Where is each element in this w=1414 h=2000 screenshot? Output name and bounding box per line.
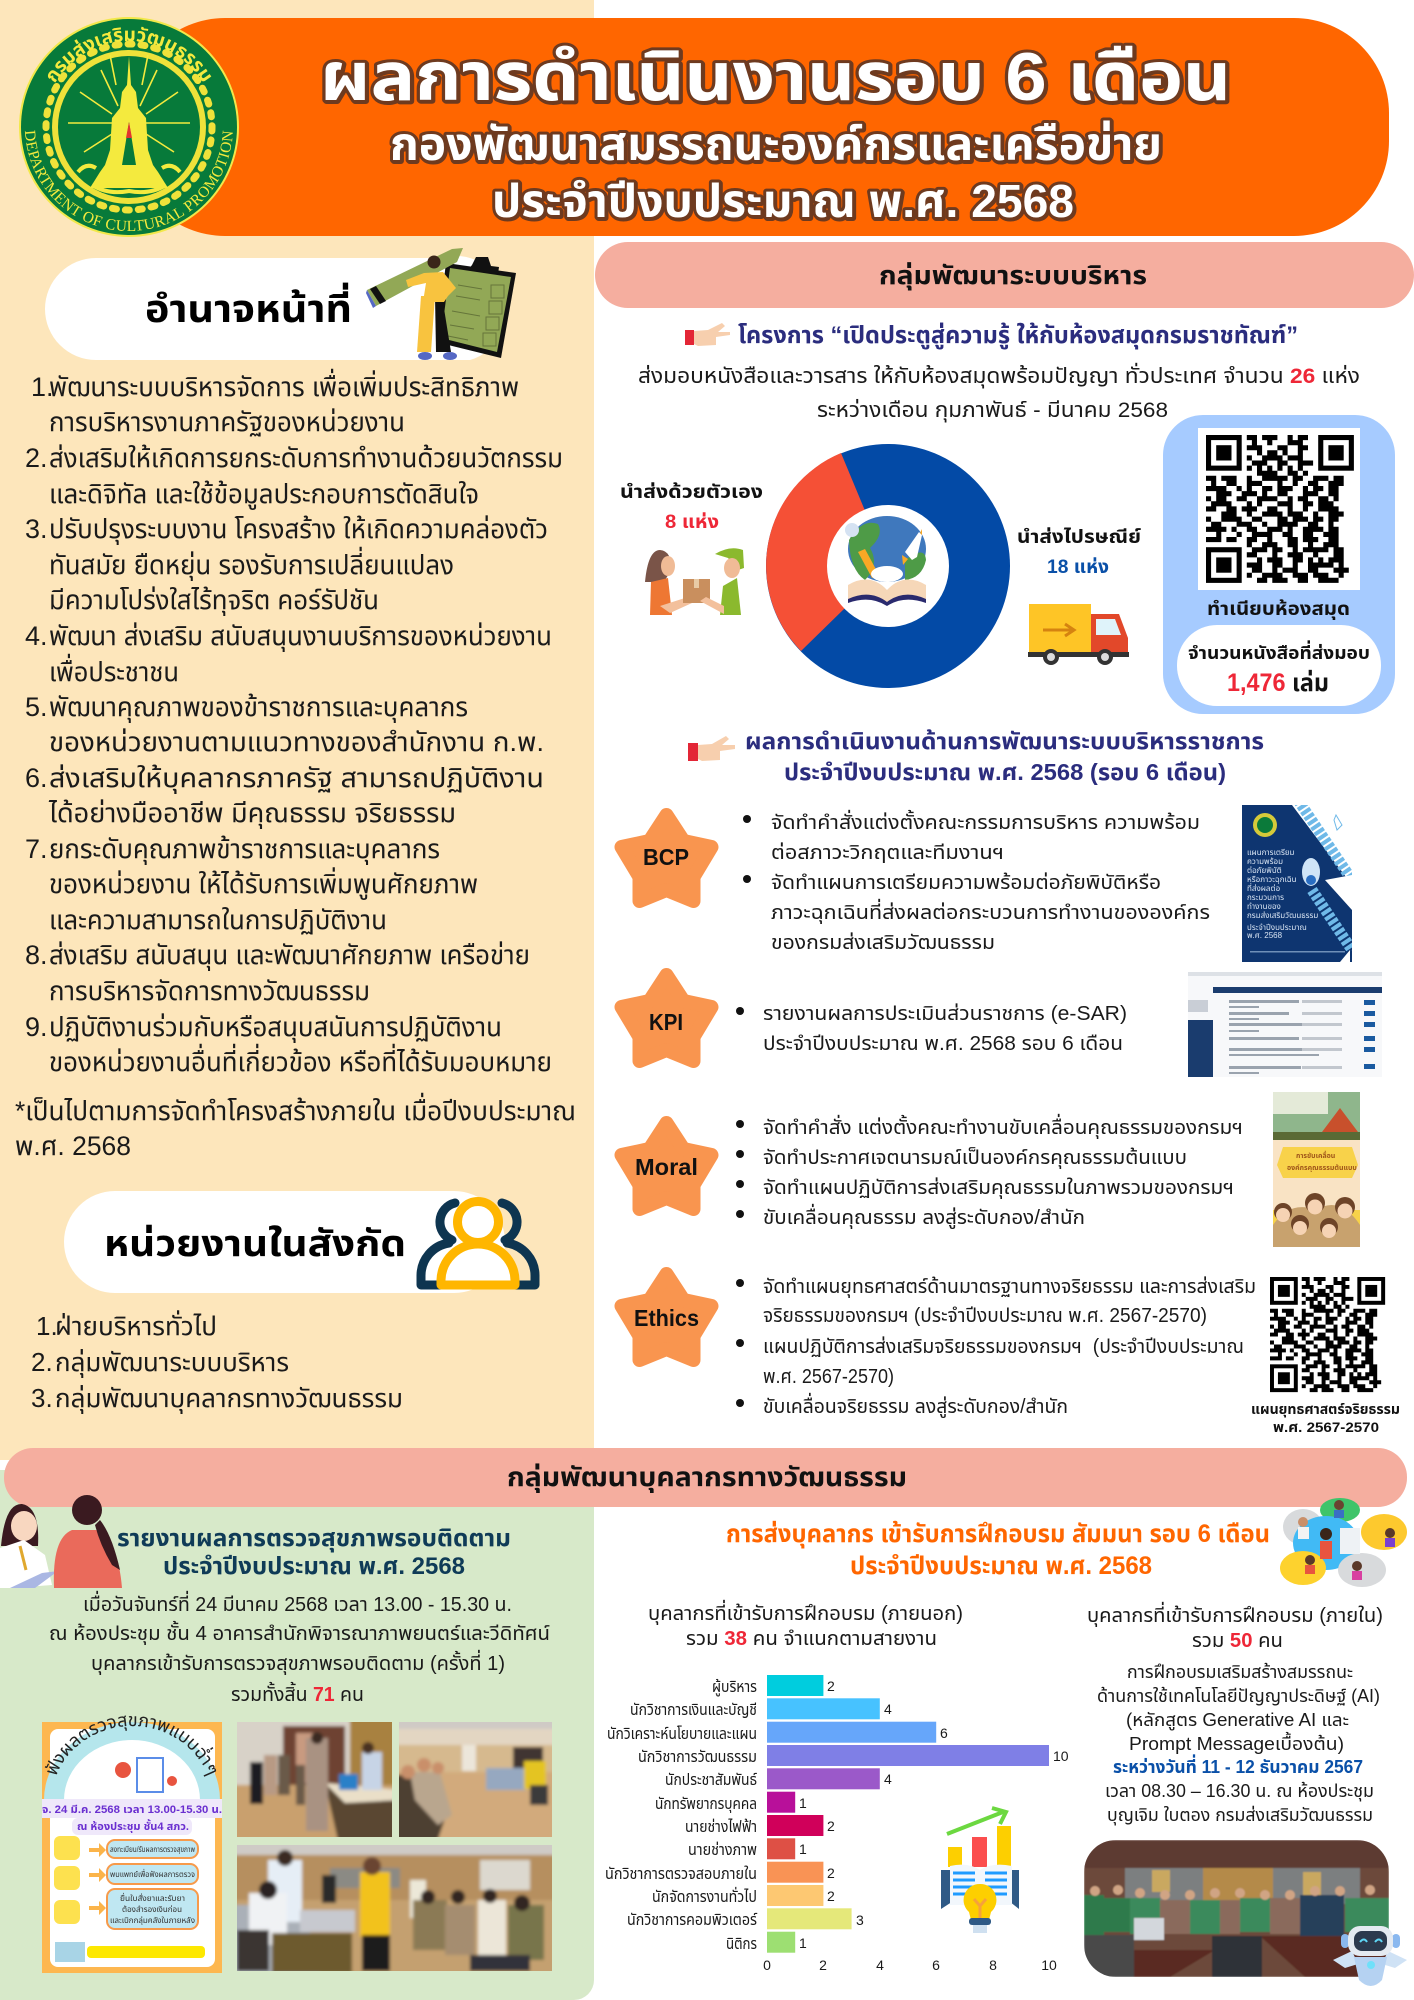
green panel background: [0, 1470, 594, 2000]
bar chart: external training by job line: 0: [763, 1957, 771, 1973]
text block: sub-units list: 2.: [31, 1347, 53, 1377]
panel: library directory QR and total books: ทำเนียบห้องสมุด: [1207, 598, 1350, 620]
text block: library project description: [638, 362, 1360, 423]
bar chart: external training by job line: 3: [856, 1912, 864, 1928]
icon: Ethics star: Ethics: [634, 1305, 699, 1331]
text block: duties list: ของหน่วยงาน ให้ได้รับการเพิ่มพูนศักยภาพ: [49, 867, 478, 900]
bar chart: external training by job line: นิติกร: [726, 1936, 757, 1953]
bar chart: external training by job line: 2: [827, 1678, 835, 1694]
text block: duties list: ได้อย่างมืออาชีพ มีคุณธรรม จริยธรรม: [48, 798, 456, 829]
text block: sub-units list: 1.: [36, 1311, 58, 1341]
text block: duties list: พัฒนาคุณภาพของข้าราชการและบุคลากร: [49, 692, 468, 723]
chart label: delivered by post: นำส่งไปรษณีย์: [1017, 526, 1141, 548]
bar chart: external training by job line: นายช่างไฟฟ้า: [685, 1818, 757, 1836]
text block: internal training details: รวม 50 คน: [1192, 1630, 1283, 1652]
image: BCP plan cover: แผนการเตรียม: [1247, 847, 1295, 857]
callout: number of books delivered: จำนวนหนังสือที่ส่งมอบ: [1188, 640, 1370, 663]
text block: KPI items: ประจำปีงบประมาณ พ.ศ. 2568 รอบ 6 เดือน: [763, 1033, 1123, 1055]
bar chart: external training by job line: 1: [799, 1841, 807, 1857]
text block: duties list: การบริหารจัดการทางวัฒนธรรม: [49, 976, 370, 1006]
heading: personnel development group: กลุ่มพัฒนาบุคลากรทางวัฒนธรรม: [507, 1462, 907, 1493]
text block: BCP items: จัดทำแผนการเตรียมความพร้อมต่อภัยพิบัติหรือ: [771, 871, 1161, 894]
image: BCP plan cover: ประจำปีงบประมาณ: [1247, 923, 1307, 932]
text block: external training heading: [648, 1599, 963, 1650]
image: BCP plan cover: ที่ส่งผลต่อ: [1247, 882, 1281, 893]
image: health check poster: จ. 24 มี.ค. 2568 เวลา 13.00-15.30 น.: [42, 1804, 222, 1816]
heading: management system group: [595, 242, 1414, 308]
text block: BCP items: [743, 809, 1210, 954]
icon: online learning group: [1280, 1498, 1407, 1587]
text block: internal training details: ด้านการใช้เทคโนโลยีปัญญาประดิษฐ์ (AI): [1097, 1686, 1380, 1706]
text block: Moral items: จัดทำแผนปฏิบัติการส่งเสริมคุณธรรมในภาพรวมของกรมฯ: [763, 1176, 1234, 1199]
panel: Moral: [622, 1092, 1360, 1247]
bar chart: external training by job line: 2: [827, 1888, 835, 1904]
donut chart: [766, 444, 1010, 688]
chart label: delivered in person: นำส่งด้วยตัวเอง: [620, 481, 763, 503]
heading: health check report: ประจำปีงบประมาณ พ.ศ. 2568: [163, 1553, 465, 1580]
text block: BCP items: ภาวะฉุกเฉินที่ส่งผลต่อกระบวนการทำงานขององค์กร: [771, 898, 1210, 924]
bar chart: external training by job line: 4: [884, 1771, 892, 1787]
text block: health check details: ณ ห้องประชุม ชั้น 4 อาคารสำนักพิจารณาภาพยนตร์และวีดิทัศน์: [49, 1620, 550, 1645]
text block: footnote: พ.ศ. 2568: [15, 1131, 131, 1161]
image: BCP plan cover: [1242, 800, 1352, 962]
text block: duties list: ทันสมัย ยืดหยุ่น รองรับการเปลี่ยนแปลง: [49, 546, 454, 581]
icon: pointing hand: [688, 736, 735, 761]
panel: Ethics: [622, 1274, 1400, 1435]
text block: internal training details: บุคลากรที่เข้ารับการฝึกอบรม (ภายใน): [1087, 1601, 1383, 1627]
bar chart: external training by job line: นักประชาสัมพันธ์: [665, 1772, 757, 1789]
bar chart: external training by job line: 8: [989, 1957, 997, 1973]
bar chart: external training by job line: [605, 1675, 1069, 1973]
text block: duties list: พัฒนา ส่งเสริม สนับสนุนงานบริการของหน่วยงาน: [49, 621, 552, 652]
text block: sub-units list: 3.: [31, 1383, 53, 1413]
bar chart: external training by job line: 1: [799, 1795, 807, 1811]
image: health check poster: ลงทะเบียน/รับผลการตรวจสุขภาพ: [110, 1844, 195, 1854]
image: BCP plan cover: หรือภาวะฉุกเฉิน: [1247, 874, 1297, 884]
text block: sub-units list: กลุ่มพัฒนาบุคลากรทางวัฒนธรรม: [55, 1383, 403, 1414]
bar chart: external training by job line: นักจัดการงานทั่วไป: [652, 1886, 757, 1906]
icon: delivery truck: [1028, 604, 1129, 665]
text block: duties list: ส่งเสริมให้บุคลากรภาครัฐ สามารถปฏิบัติงาน: [49, 763, 544, 794]
heading: administration results: ผลการดำเนินงานด้านการพัฒนาระบบบริหารราชการ: [745, 728, 1264, 754]
heading: training results: การส่งบุคลากร เข้ารับการฝึกอบรม สัมมนา รอบ 6 เดือน: [726, 1520, 1270, 1549]
bar chart: external training by job line: 4: [876, 1957, 884, 1973]
image: health check poster: ยื่นใบสั่งยาและรับยา: [120, 1892, 185, 1903]
heading: training results: ประจำปีงบประมาณ พ.ศ. 2568: [850, 1552, 1152, 1580]
text block: health check details: เมื่อวันจันทร์ที่ 24 มีนาคม 2568 เวลา 13.00 - 15.30 น.: [83, 1590, 512, 1616]
text block: internal training details: [1087, 1601, 1383, 1826]
text block: duties list: 8.: [25, 940, 48, 970]
text block: health check details: บุคลากรเข้ารับการตรวจสุขภาพรอบติดตาม (ครั้งที่ 1): [91, 1649, 505, 1675]
text block: internal training details: (หลักสูตร Generative AI และ: [1126, 1710, 1349, 1732]
text block: library project description: ส่งมอบหนังสือและวารสาร ให้กับห้องสมุดพร้อมปัญญา ทั่วประเทศ จำนวน 26 แห่ง: [638, 362, 1360, 389]
bar chart: external training by job line: 2: [827, 1865, 835, 1881]
bar chart: external training by job line: 10: [1041, 1957, 1057, 1973]
bar chart: external training by job line: 2: [827, 1818, 835, 1834]
text block: sub-units list: [31, 1309, 403, 1414]
QR code: ethics strategy: [1270, 1279, 1383, 1390]
icon: pointing hand: [685, 323, 730, 346]
photo: seated staff: [399, 1722, 552, 1837]
text block: external training heading: บุคลากรที่เข้ารับการฝึกอบรม (ภายนอก): [648, 1599, 963, 1625]
text block: health check details: รวมทั้งสิ้น 71 คน: [231, 1681, 364, 1706]
text block: library project description: ระหว่างเดือน กุมภาพันธ์ - มีนาคม 2568: [817, 398, 1168, 423]
icon: people exchanging parcel: [645, 548, 744, 615]
bar chart: external training by job line: นักวิชาการเงินและบัญชี: [630, 1702, 757, 1719]
text block: duties list: มีความโปร่งใสไร้ทุจริต คอร์รัปชัน: [49, 585, 379, 616]
text block: sub-units list: กลุ่มพัฒนาระบบบริหาร: [55, 1347, 289, 1378]
caption: ethics strategy QR: [1251, 1401, 1400, 1435]
icon: robot mascot: [1333, 1926, 1407, 1986]
bar chart: external training by job line: นักทรัพยากรบุคคล: [655, 1796, 757, 1813]
bar chart: external training by job line: นักวิชาการวัฒนธรรม: [638, 1749, 757, 1766]
image: e-SAR screenshot: [1188, 972, 1382, 1077]
panel: BCP: [622, 800, 1352, 962]
left cream background column: [0, 0, 594, 1460]
text block: Ethics items: ขับเคลื่อนจริยธรรม ลงสู่ระดับกอง/สำนัก: [763, 1392, 1068, 1419]
text block: internal training details: เวลา 08.30 – 16.30 น. ณ ห้องประชุม: [1105, 1781, 1374, 1802]
bar chart: external training by job line: 2: [819, 1957, 827, 1973]
text block: Moral items: จัดทำประกาศเจตนารมณ์เป็นองค์กรคุณธรรมต้นแบบ: [763, 1146, 1187, 1169]
icon: people group: [421, 1202, 535, 1285]
QR code: library directory: [1198, 428, 1360, 590]
photo: training group: [1084, 1840, 1389, 1977]
icon: doctor and patient: [0, 1495, 122, 1588]
caption: ethics strategy QR: พ.ศ. 2567-2570: [1273, 1419, 1379, 1435]
text block: internal training details: การฝึกอบรมเสริมสร้างสมรรถนะ: [1127, 1662, 1353, 1682]
panel: sub-units heading: [64, 1191, 505, 1293]
heading: personnel development group: [4, 1448, 1407, 1507]
bar chart: external training by job line: 1: [799, 1935, 807, 1951]
text block: Ethics items: จัดทำแผนยุทธศาสตร์ด้านมาตรฐานทางจริยธรรม และการส่งเสริม: [763, 1275, 1256, 1298]
panel: library directory QR and total books: [1163, 415, 1395, 714]
image: BCP plan cover: กรมส่งเสริมวัฒนธรรม: [1247, 910, 1318, 920]
image: health check poster: พบแพทย์เพื่อฟังผลการตรวจ: [110, 1868, 195, 1879]
image: BCP plan cover: ต่อภัยพิบัติ: [1247, 865, 1282, 875]
text block: internal training details: บุญเจิม ใบตอง กรมส่งเสริมวัฒนธรรม: [1107, 1805, 1373, 1826]
text block: duties list: ส่งเสริม สนับสนุน และพัฒนาศักยภาพ เครือข่าย: [49, 940, 530, 971]
chart label: delivered by post: [1017, 526, 1141, 578]
text block: internal training details: ระหว่างวันที่ 11 - 12 ธันวาคม 2567: [1113, 1754, 1363, 1777]
icon: department logo: DEPARTMENT OF CULTURAL PROMOTION: [24, 130, 233, 231]
panel: powers and duties heading: [45, 256, 508, 360]
text block: duties list: และความสามารถในการปฏิบัติงาน: [49, 905, 387, 935]
callout: number of books delivered: [1177, 625, 1381, 706]
photo: health check queue: [237, 1722, 392, 1837]
text block: Moral items: จัดทำคำสั่ง แต่งตั้งคณะทำงานขับเคลื่อนคุณธรรมของกรมฯ: [763, 1113, 1243, 1139]
text block: duties list: 6.: [25, 763, 48, 793]
text block: duties list: ของหน่วยงานอื่นที่เกี่ยวข้อง หรือที่ได้รับมอบหมาย: [49, 1043, 552, 1077]
text block: duties list: 4.: [25, 621, 48, 651]
bar chart: external training by job line: นักวิชาการตรวจสอบภายใน: [605, 1866, 757, 1883]
text block: duties list: 5.: [25, 692, 48, 722]
text block: Ethics items: แผนปฏิบัติการส่งเสริมจริยธรรมของกรมฯ (ประจำปีงบประมาณ: [763, 1335, 1244, 1358]
bar chart: external training by job line: 6: [940, 1725, 948, 1741]
heading: health check report: รายงานผลการตรวจสุขภาพรอบติดตาม: [117, 1525, 511, 1553]
bar chart: external training by job line: 10: [1053, 1748, 1069, 1764]
icon: department logo: [19, 17, 239, 237]
text block: KPI items: [736, 1002, 1127, 1055]
bar chart: external training by job line: นักวิเคราะห์นโยบายและแผน: [607, 1726, 757, 1743]
text block: Moral items: ขับเคลื่อนคุณธรรม ลงสู่ระดับกอง/สำนัก: [763, 1203, 1085, 1230]
text block: duties list: และดิจิทัล และใช้ข้อมูลประกอบการตัดสินใจ: [49, 479, 479, 510]
bar chart: external training by job line: นักวิชาการคอมพิวเตอร์: [627, 1912, 758, 1929]
heading: training results: [726, 1520, 1270, 1580]
icon: KPI star: KPI: [649, 1009, 683, 1035]
text block: BCP items: จัดทำคำสั่งแต่งตั้งคณะกรรมการบริหาร ความพร้อม: [771, 809, 1200, 834]
icon: department logo: กรมส่งเสริมวัฒนธรรม: [48, 26, 212, 82]
text block: duties list: พัฒนาระบบบริหารจัดการ เพื่อเพิ่มประสิทธิภาพ: [49, 368, 519, 402]
text block: BCP items: ของกรมส่งเสริมวัฒนธรรม: [771, 931, 995, 954]
icon: book, light bulb and growth arrow: [941, 1808, 1019, 1933]
text block: duties list: ปฏิบัติงานร่วมกับหรือสนุบสนันการปฏิบัติงาน: [49, 1012, 502, 1043]
heading: library project: โครงการ “เปิดประตูสู่ความรู้ ให้กับห้องสมุดกรมราชทัณฑ์”: [738, 321, 1298, 350]
image: moral plan cover: การขับเคลื่อน: [1296, 1150, 1335, 1160]
text block: sub-units list: ฝ่ายบริหารทั่วไป: [55, 1309, 217, 1341]
title banner: [130, 18, 1389, 236]
icon: KPI star: [622, 975, 712, 1061]
icon: BCP star: BCP: [643, 844, 689, 870]
text block: Ethics items: [736, 1275, 1256, 1419]
image: BCP plan cover: ทำงานของ: [1247, 902, 1281, 911]
text block: duties list: ของหน่วยงานตามแนวทางของสำนักงาน ก.พ.: [49, 727, 544, 757]
icon: Moral star: Moral: [635, 1154, 698, 1180]
icon: BCP star: [622, 815, 712, 901]
text block: duties list: เพื่อประชาชน: [49, 653, 179, 687]
icon: Ethics star: [622, 1274, 712, 1360]
text block: footnote: *เป็นไปตามการจัดทำโครงสร้างภายใน เมื่อปีงบประมาณ: [15, 1092, 576, 1126]
text block: Ethics items: พ.ศ. 2567-2570): [763, 1366, 894, 1388]
image: health check poster: และเบิกกลุ่มคลังในภายหลัง: [110, 1915, 195, 1925]
bar chart: external training by job line: นายช่างภาพ: [688, 1841, 757, 1859]
text block: internal training details: Prompt Messageเบื้องต้น): [1129, 1731, 1344, 1754]
image: moral plan cover: [1273, 1092, 1360, 1247]
bar chart: external training by job line: 6: [932, 1957, 940, 1973]
image: BCP plan cover: ความพร้อม: [1247, 856, 1283, 866]
image: health check poster: [42, 1716, 222, 1973]
heading: management system group: กลุ่มพัฒนาระบบบริหาร: [879, 260, 1147, 291]
title banner: ผลการดำเนินงานรอบ 6 เดือน: [320, 39, 1231, 115]
panel: KPI: [622, 972, 1382, 1077]
panel: powers and duties heading: อำนาจหน้าที่: [145, 282, 352, 331]
image: health check poster: ณ ห้องประชุม ชั้น4 สภว.: [77, 1818, 189, 1833]
title banner: ประจำปีงบประมาณ พ.ศ. 2568: [492, 175, 1074, 227]
text block: duties list: การบริหารงานภาครัฐของหน่วยงาน: [49, 407, 405, 437]
icon: Moral star: [622, 1123, 712, 1209]
heading: health check report: [117, 1525, 511, 1580]
icon: globe and book: [845, 516, 926, 606]
text block: Moral items: [736, 1113, 1243, 1230]
text block: KPI items: รายงานผลการประเมินส่วนราชการ (e-SAR): [763, 1002, 1127, 1025]
text block: duties list: 2.: [25, 443, 48, 473]
photo: health check room: [237, 1845, 552, 1971]
text block: footnote: [15, 1092, 576, 1161]
chart label: delivered by post: 18 แห่ง: [1047, 556, 1109, 578]
text block: duties list: ปรับปรุงระบบงาน โครงสร้าง ให้เกิดความคล่องตัว: [49, 514, 548, 545]
chart label: delivered in person: [620, 481, 763, 533]
text block: external training heading: รวม 38 คน จำแนกตามสายงาน: [686, 1628, 937, 1650]
icon: person with pencil and clipboard: [366, 248, 516, 360]
image: BCP plan cover: กระบวนการ: [1247, 893, 1284, 902]
text block: duties list: [25, 368, 563, 1077]
text block: duties list: ส่งเสริมให้เกิดการยกระดับการทำงานด้วยนวัตกรรม: [49, 443, 563, 473]
text block: duties list: ยกระดับคุณภาพข้าราชการและบุคลากร: [49, 834, 440, 865]
image: health check poster: ต้องสำรองเงินก่อน: [122, 1904, 182, 1914]
text block: duties list: 1.: [31, 372, 54, 402]
bar chart: external training by job line: 4: [884, 1701, 892, 1717]
callout: number of books delivered: 1,476 เล่ม: [1227, 669, 1329, 697]
chart label: delivered in person: 8 แห่ง: [665, 511, 719, 533]
text block: BCP items: ต่อสภาวะวิกฤตและทีมงานฯ: [771, 841, 1004, 864]
text block: duties list: 3.: [25, 514, 48, 544]
panel: sub-units heading: หน่วยงานในสังกัด: [104, 1223, 406, 1264]
text block: Ethics items: จริยธรรมของกรมฯ (ประจำปีงบประมาณ พ.ศ. 2567-2570): [763, 1305, 1207, 1327]
image: moral plan cover: องค์กรคุณธรรมต้นแบบ: [1287, 1164, 1357, 1173]
image: health check poster: ฟังผลตรวจสุขภาพแบบฉ่ำๆ: [44, 1716, 216, 1777]
text block: health check details: [49, 1590, 550, 1706]
caption: ethics strategy QR: แผนยุทธศาสตร์จริยธรรม: [1251, 1401, 1400, 1418]
image: BCP plan cover: พ.ศ. 2568: [1247, 931, 1283, 940]
text block: duties list: 7.: [25, 834, 48, 864]
title banner: กองพัฒนาสมรรถนะองค์กรและเครือข่าย: [390, 118, 1162, 170]
heading: administration results: ประจำปีงบประมาณ พ.ศ. 2568 (รอบ 6 เดือน): [784, 759, 1226, 785]
heading: administration results: [745, 728, 1264, 785]
text block: duties list: 9.: [25, 1012, 48, 1042]
bar chart: external training by job line: ผู้บริหาร: [712, 1679, 757, 1696]
